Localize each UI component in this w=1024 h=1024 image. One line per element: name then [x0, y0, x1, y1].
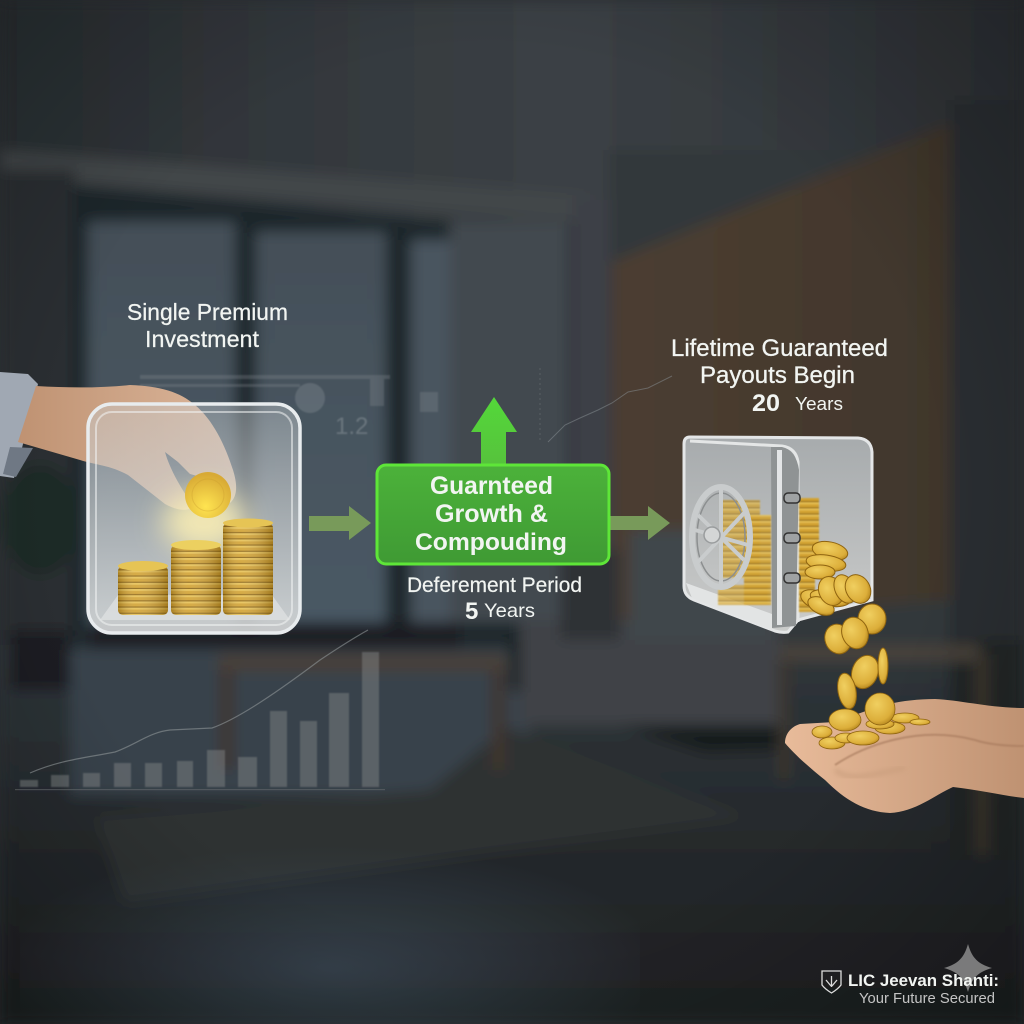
guaranteed growth panel: Compouding	[415, 529, 567, 556]
lifetime payouts label: Lifetime Guaranteed	[671, 335, 888, 362]
shield logo icon	[822, 971, 841, 993]
footer logo and brand: Your Future Secured	[859, 991, 995, 1007]
coin being dropped	[185, 472, 231, 518]
lifetime payouts label: 20	[752, 390, 780, 417]
coin stacks	[118, 518, 273, 615]
single premium label: Investment	[145, 326, 260, 352]
guaranteed growth panel: Growth &	[435, 500, 548, 528]
footer logo and brand: LIC Jeevan Shanti:	[848, 971, 999, 990]
single premium label	[127, 299, 288, 352]
floor reflection	[20, 800, 640, 1024]
safe hinges	[784, 493, 800, 583]
single premium label: Single Premium	[127, 299, 288, 325]
lifetime payouts label: Years	[795, 393, 843, 414]
lifetime payouts label: Payouts Begin	[700, 362, 855, 389]
single premium transparent box	[88, 404, 300, 633]
faded line chart near upward arrow	[540, 368, 672, 442]
left hand and sleeve	[0, 372, 236, 510]
deferment period label	[407, 574, 582, 625]
faded bar chart with trend line	[15, 630, 385, 790]
arrow: growth to safe	[609, 506, 670, 540]
coins inside the safe	[718, 498, 819, 612]
arrow: box to growth	[309, 506, 371, 540]
watermark star	[944, 944, 992, 992]
glow under coin	[162, 492, 246, 552]
arrow: upward growth	[471, 397, 517, 466]
faded data overlay behind left box	[140, 375, 438, 440]
lifetime payouts label	[671, 335, 888, 417]
coins in hand	[812, 693, 930, 749]
transparent safe with coins	[684, 437, 872, 632]
guaranteed growth panel: Guarnteed	[430, 473, 553, 500]
right cupped hand with coins	[785, 693, 1024, 813]
guaranteed growth panel	[377, 465, 609, 564]
deferment period label: Deferement Period	[407, 574, 582, 597]
footer logo and brand	[822, 971, 999, 1007]
safe wheel	[692, 487, 750, 587]
spilling coins	[798, 538, 888, 710]
deferment period label: Years	[484, 600, 535, 622]
faded data overlay behind left box: 1.2	[335, 413, 368, 440]
deferment period label: 5	[465, 598, 478, 625]
